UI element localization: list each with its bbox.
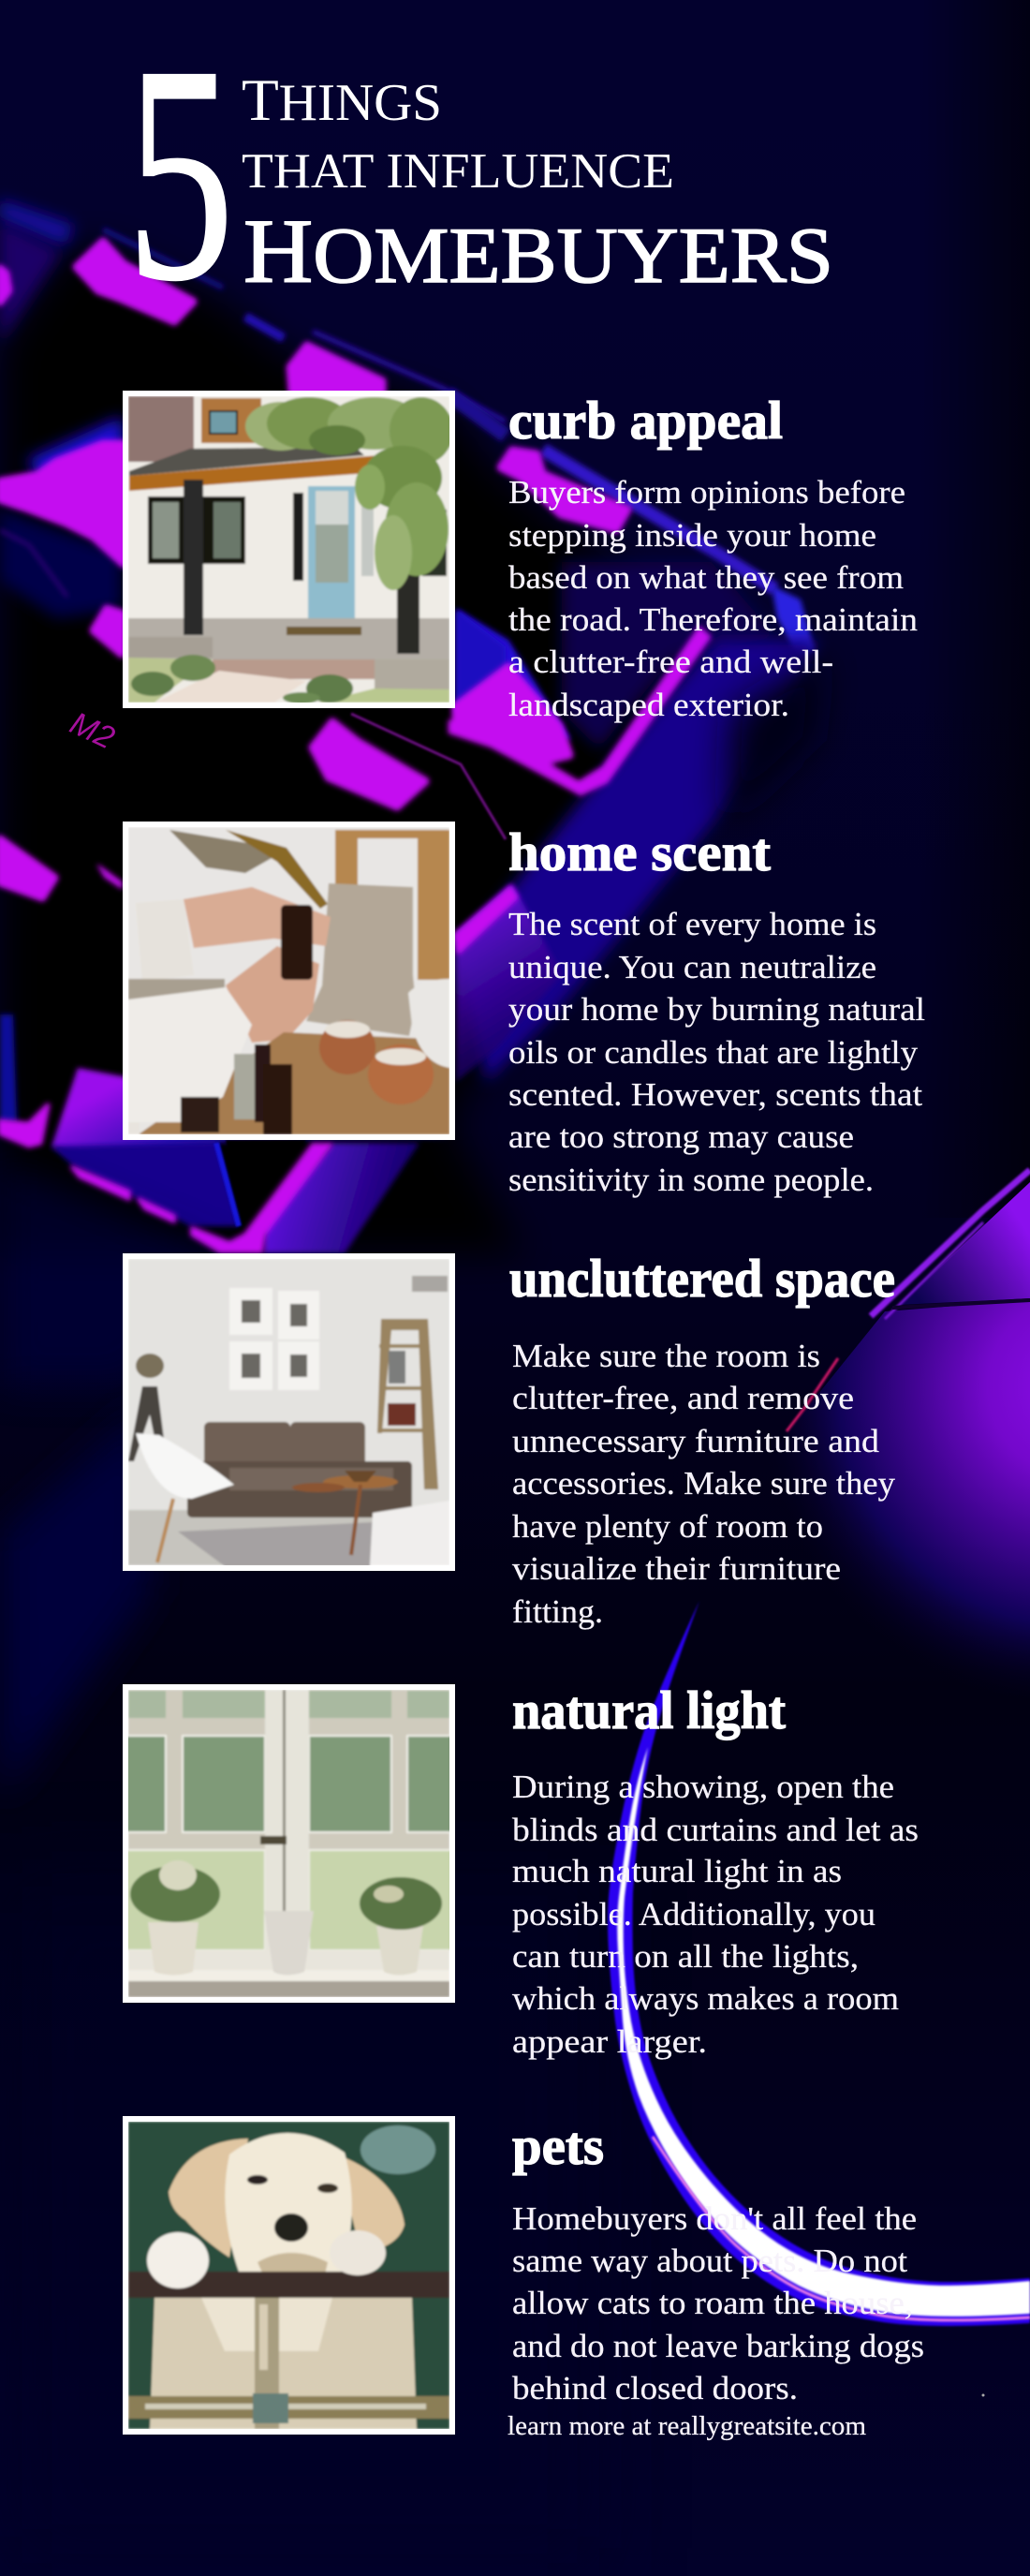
body text: natural light: which always makes a room bbox=[512, 1980, 899, 2017]
heading: natural light: natural light bbox=[512, 1681, 786, 1740]
body text: uncluttered space: fitting. bbox=[512, 1593, 603, 1630]
body text: home scent: are too strong may cause bbox=[508, 1118, 854, 1155]
body text: natural light: possible. Additionally, you bbox=[512, 1896, 876, 1932]
body text: pets: behind closed doors. bbox=[512, 2370, 798, 2406]
body text: home scent: The scent of every home is bbox=[508, 906, 876, 942]
heading: home scent: home scent bbox=[508, 823, 771, 882]
title bbox=[126, 3, 833, 345]
body text: uncluttered space bbox=[512, 1338, 896, 1630]
heading: pets: pets bbox=[512, 2117, 604, 2176]
body text: natural light: much natural light in as bbox=[512, 1853, 842, 1889]
body text: home scent: your home by burning natural bbox=[508, 991, 925, 1028]
glowing arc bbox=[608, 1601, 1030, 2326]
panel: curb appeal bbox=[123, 391, 918, 723]
body text: pets: Homebuyers don't all feel the bbox=[512, 2200, 917, 2237]
body text: pets: same way about pets. Do not bbox=[512, 2243, 907, 2279]
panel: uncluttered space bbox=[123, 1250, 896, 1630]
photo frame: hands with candles bbox=[123, 822, 455, 1140]
photo frame: labrador puppy bbox=[123, 2116, 455, 2435]
body text: curb appeal bbox=[508, 474, 918, 723]
body text: curb appeal: based on what they see from bbox=[508, 559, 904, 596]
title numeral 5: 5 bbox=[126, 3, 234, 345]
panel: pets bbox=[123, 2116, 924, 2435]
body text: uncluttered space: accessories. Make sure they bbox=[512, 1465, 896, 1502]
photo frame: living room bbox=[123, 1253, 455, 1571]
body text: curb appeal: the road. Therefore, maintain bbox=[508, 601, 918, 638]
body text: uncluttered space: visualize their furniture bbox=[512, 1550, 841, 1587]
body text: home scent: oils or candles that are lightly bbox=[508, 1034, 919, 1071]
text on key: M2: M2 bbox=[65, 705, 120, 756]
body text: pets bbox=[512, 2200, 924, 2406]
body text: curb appeal: landscaped exterior. bbox=[508, 687, 789, 723]
body text: home scent bbox=[508, 906, 925, 1198]
body text: natural light: blinds and curtains and let as bbox=[512, 1812, 919, 1848]
body text: natural light bbox=[512, 1769, 919, 2060]
body text: uncluttered space: unnecessary furniture and bbox=[512, 1423, 880, 1459]
body text: pets: allow cats to roam the house, bbox=[512, 2285, 913, 2321]
panel: home scent bbox=[123, 822, 925, 1198]
body text: curb appeal: stepping inside your home bbox=[508, 517, 876, 554]
heading: curb appeal: curb appeal bbox=[508, 392, 783, 451]
panel: natural light bbox=[123, 1681, 919, 2060]
body text: pets: and do not leave barking dogs bbox=[512, 2328, 924, 2364]
body text: natural light: appear larger. bbox=[512, 2023, 707, 2060]
body text: home scent: sensitivity in some people. bbox=[508, 1162, 874, 1198]
photo frame: house exterior bbox=[123, 391, 455, 708]
body text: uncluttered space: have plenty of room to bbox=[512, 1508, 823, 1545]
body text: natural light: During a showing, open the bbox=[512, 1769, 894, 1805]
footer link text: learn more at reallygreatsite.com bbox=[508, 2412, 866, 2441]
title line: that influence: THAT INFLUENCE bbox=[242, 144, 674, 199]
body text: home scent: scented. However, scents that bbox=[508, 1076, 922, 1113]
heading: uncluttered space: uncluttered space bbox=[509, 1250, 895, 1309]
title line: homebuyers: HOMEBUYERS bbox=[243, 201, 833, 302]
body text: curb appeal: a clutter-free and well- bbox=[508, 644, 833, 680]
body text: curb appeal: Buyers form opinions before bbox=[508, 474, 905, 511]
title line: things: THINGS bbox=[242, 67, 442, 133]
photo frame: window with flowers bbox=[123, 1684, 455, 2003]
body text: home scent: unique. You can neutralize bbox=[508, 949, 876, 985]
body text: uncluttered space: clutter-free, and remove bbox=[512, 1380, 854, 1416]
body text: natural light: can turn on all the lights, bbox=[512, 1938, 859, 1975]
body text: uncluttered space: Make sure the room is bbox=[512, 1338, 820, 1374]
